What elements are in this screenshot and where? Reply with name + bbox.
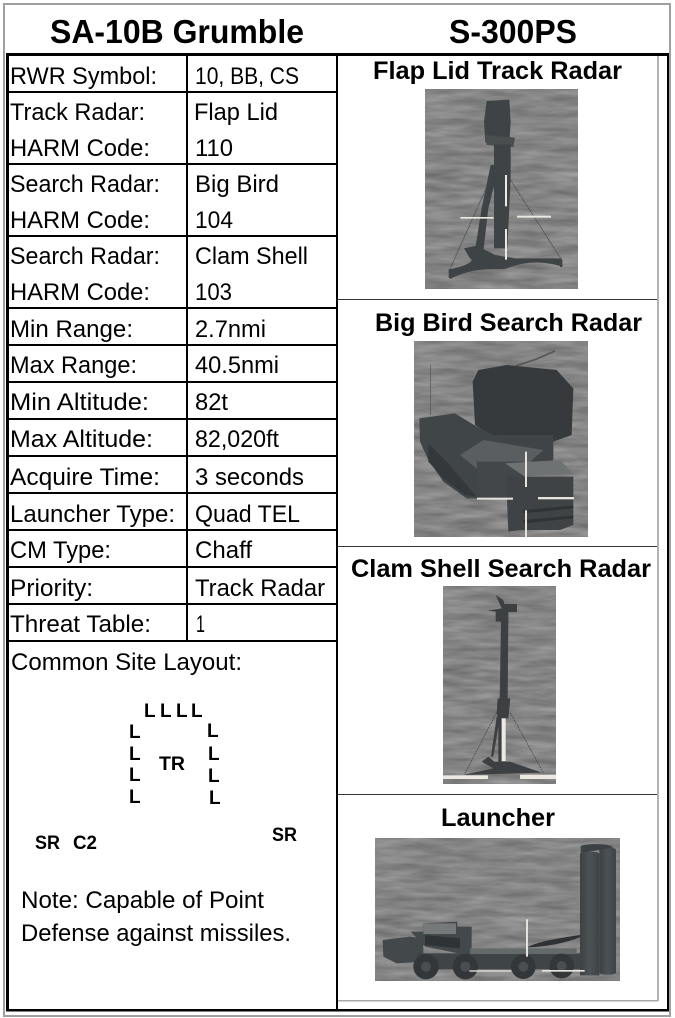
data table: 1 — [196, 611, 205, 638]
data table: 3 seconds — [195, 464, 304, 491]
data table: Clam Shell — [195, 243, 308, 270]
divider — [338, 546, 657, 547]
site layout diagram: C2 — [73, 833, 97, 854]
data table: Big Bird — [195, 171, 279, 198]
note: Defense against missiles. — [21, 920, 291, 947]
site layout diagram: L — [160, 701, 172, 722]
data table: 2.7nmi — [195, 316, 266, 343]
data table: Track Radar: — [10, 99, 145, 126]
site layout diagram: SR — [35, 833, 60, 854]
panel: launcher — [375, 804, 620, 981]
panel: clam shell search radar — [351, 555, 651, 784]
data table: Acquire Time: — [10, 464, 160, 491]
data table: Flap Lid — [194, 99, 278, 126]
note — [21, 887, 291, 947]
data table: 104 — [195, 207, 233, 234]
divider — [338, 299, 657, 300]
note: Note: Capable of Point — [21, 887, 264, 914]
divider — [338, 794, 657, 795]
data table: Priority: — [10, 575, 93, 602]
data table: Launcher Type: — [10, 501, 175, 528]
site layout diagram: L — [129, 787, 141, 808]
heading: big bird: Big Bird Search Radar — [375, 309, 642, 337]
data table: 82t — [195, 389, 228, 416]
data table: HARM Code: — [10, 279, 150, 306]
site layout diagram: SR — [272, 825, 297, 846]
data table — [8, 55, 336, 642]
data table: 10, BB, CS — [195, 63, 299, 90]
site layout diagram: L — [129, 722, 141, 743]
data table: 82,020ft — [195, 426, 279, 453]
site layout diagram: L — [209, 788, 221, 809]
site layout diagram — [35, 701, 297, 854]
data table: Track Radar — [195, 575, 325, 602]
heading: launcher: Launcher — [441, 804, 555, 832]
data table: HARM Code: — [10, 135, 150, 162]
site layout diagram: L — [207, 721, 219, 742]
data table: Quad TEL — [195, 501, 300, 528]
heading: clam shell: Clam Shell Search Radar — [351, 555, 651, 583]
data table: Threat Table: — [10, 611, 151, 638]
title: S-300PS: S-300PS — [449, 13, 577, 50]
site layout diagram: L — [208, 744, 220, 765]
data table: Max Altitude: — [10, 426, 153, 453]
site layout diagram: L — [176, 701, 188, 722]
data table: Min Altitude: — [10, 389, 149, 416]
site layout diagram: L — [191, 701, 203, 722]
panel: big bird search radar — [375, 309, 642, 537]
site layout diagram: L — [129, 744, 141, 765]
panel: flap lid track radar — [373, 57, 622, 289]
title: SA-10B Grumble: SA-10B Grumble — [50, 13, 304, 50]
data table: HARM Code: — [10, 207, 150, 234]
data table: Search Radar: — [10, 171, 160, 198]
data table: CM Type: — [10, 537, 111, 564]
site layout diagram: TR — [159, 754, 185, 775]
data table: Max Range: — [10, 352, 137, 379]
site layout diagram: L — [129, 765, 141, 786]
site layout diagram: L — [208, 766, 220, 787]
common site layout heading: Common Site Layout: — [11, 649, 242, 676]
data table: 40.5nmi — [195, 352, 279, 379]
data table: 103 — [195, 279, 232, 306]
data table: RWR Symbol: — [10, 63, 157, 90]
data table: Min Range: — [10, 316, 133, 343]
heading: flap lid: Flap Lid Track Radar — [373, 57, 622, 85]
data table: 110 — [195, 135, 233, 162]
data table: Search Radar: — [10, 243, 160, 270]
site layout diagram: L — [144, 701, 156, 722]
data table: Chaff — [195, 537, 252, 564]
